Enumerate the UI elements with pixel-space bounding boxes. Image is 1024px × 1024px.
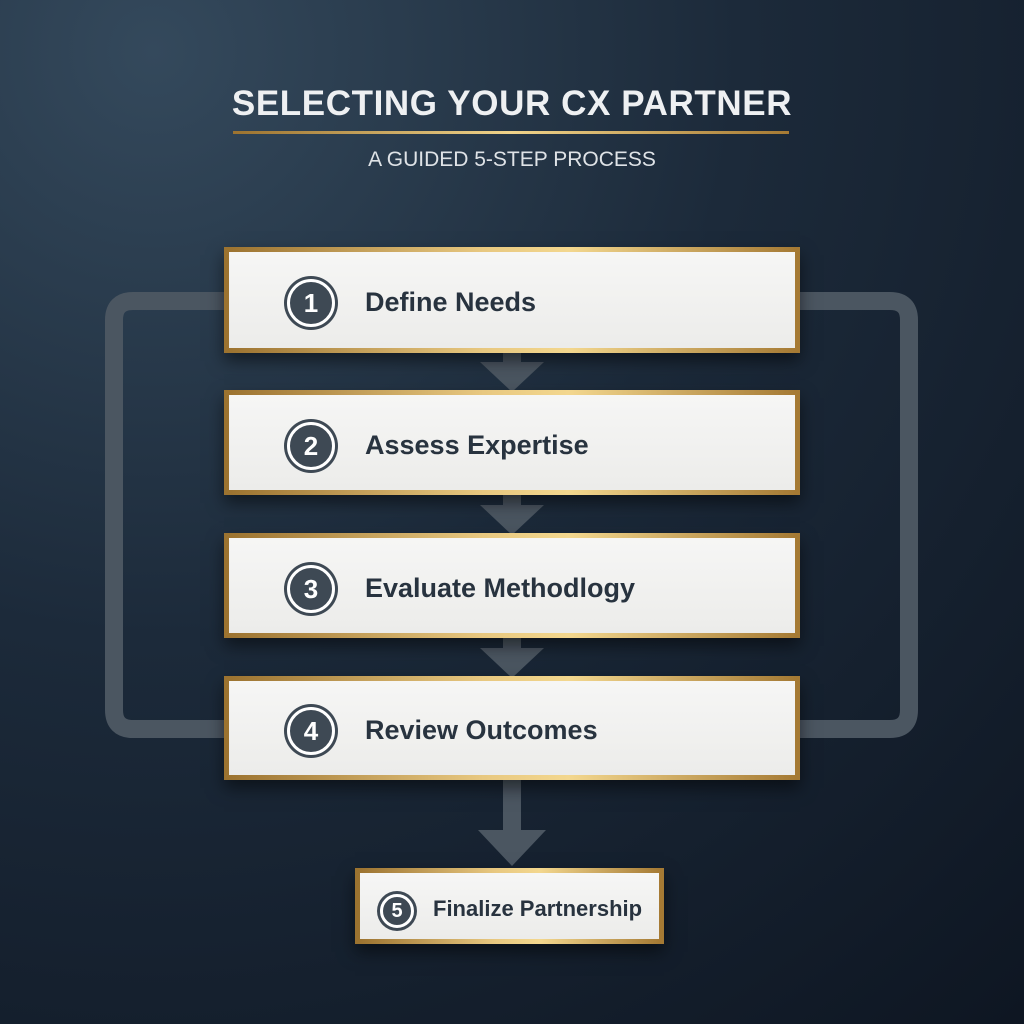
step 4: 4 [304, 716, 318, 746]
title: SELECTING YOUR CX PARTNER [232, 84, 792, 123]
step 5: 5 [391, 900, 403, 922]
step 1: 1 [304, 288, 318, 318]
step 3: Evaluate Methodlogy [365, 573, 635, 603]
step 4 [224, 676, 800, 780]
step 3 [224, 533, 800, 638]
step 1: Define Needs [365, 287, 536, 317]
step 1 [224, 247, 800, 353]
step 5 [355, 868, 664, 944]
step 3: 3 [304, 574, 318, 604]
step 2: 2 [304, 431, 318, 461]
subtitle: A GUIDED 5-STEP PROCESS [368, 148, 656, 171]
step 5: Finalize Partnership [433, 896, 642, 921]
step 4: Review Outcomes [365, 715, 598, 745]
gold underline [233, 131, 789, 134]
step 2: Assess Expertise [365, 430, 589, 460]
step 2 [224, 390, 800, 495]
